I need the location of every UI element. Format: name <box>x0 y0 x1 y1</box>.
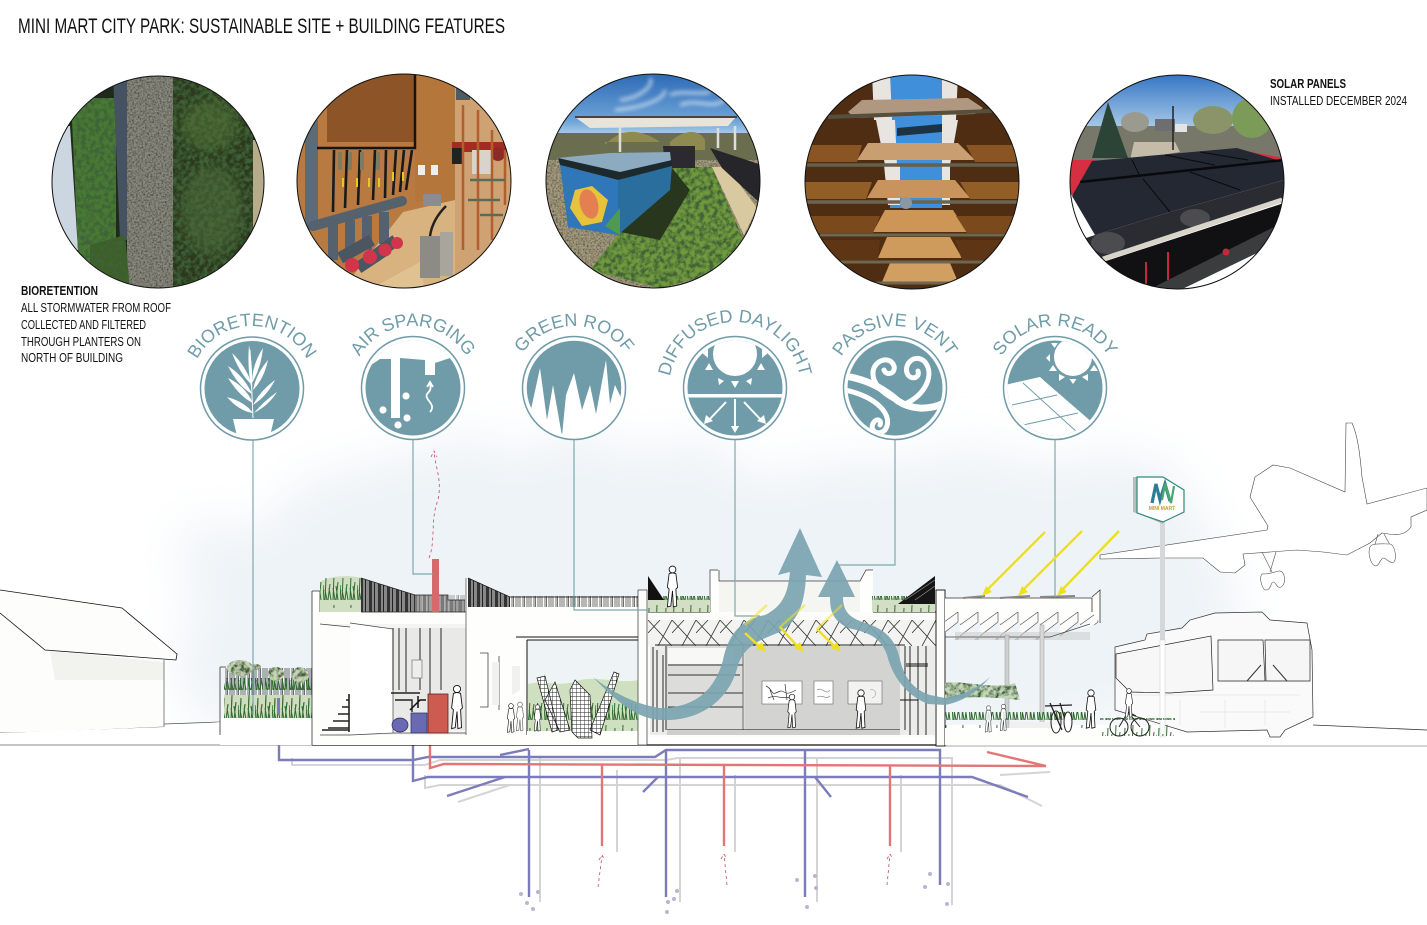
boiler red tank <box>428 694 448 733</box>
underground pipes: gray shadows <box>292 757 1050 905</box>
wall east of gallery <box>936 590 945 746</box>
curved labels <box>187 310 1118 375</box>
gallery section <box>638 566 945 746</box>
gallery interior <box>665 645 905 730</box>
curved labels: BIORETENTION <box>187 313 317 358</box>
photo outline 1 <box>52 76 264 288</box>
curved labels: GREEN ROOF <box>516 314 635 350</box>
neighboring house <box>0 590 220 733</box>
photo: bioretention planter from above <box>50 74 266 290</box>
west mid wall and window <box>465 578 467 735</box>
air sparging stack <box>432 559 439 612</box>
sculpture letters <box>537 672 619 738</box>
group of people in breezeway <box>507 704 515 732</box>
breezeway opening <box>527 640 638 735</box>
sun rays: skylight <box>745 605 842 652</box>
solar canopy <box>945 590 1115 745</box>
ground <box>0 722 1427 925</box>
title: MINI MART CITY PARK: SUSTAINABLE SITE + BUILDING FEATURES <box>18 15 505 38</box>
photo outline 5 <box>1070 75 1284 289</box>
west stair <box>322 694 349 732</box>
feature leader lines <box>253 440 1055 715</box>
sign pole <box>1160 521 1165 737</box>
airplane silhouette <box>1100 423 1427 590</box>
dashed air arrows <box>429 451 893 887</box>
wind arrow: air flow east swoosh <box>818 560 990 705</box>
mini mart sign: MINI MART <box>1149 506 1175 512</box>
caption: bioretention: ALL STORMWATER FROM ROOF <box>21 300 171 315</box>
roof planter east <box>872 598 935 612</box>
caption: bioretention: THROUGH PLANTERS ON <box>21 334 141 349</box>
photo: diffused daylight skylight <box>803 73 1023 293</box>
artwork <box>762 681 802 704</box>
wind arrow: air flow west swoosh <box>593 528 822 720</box>
roof truss <box>648 620 936 646</box>
photo: solar panels <box>1068 73 1288 295</box>
slanted roof fence <box>468 578 510 607</box>
roof planter west <box>648 598 710 612</box>
ground line <box>0 745 1427 746</box>
photo outline 3 <box>546 74 760 288</box>
photo: green roof <box>544 72 764 290</box>
icon: solar ready <box>1000 336 1106 445</box>
underground pipes: blue <box>279 745 1028 897</box>
caption: bioretention: NORTH OF BUILDING <box>21 350 123 365</box>
watercolor sky wash <box>190 445 1270 730</box>
blue tank <box>411 713 427 733</box>
icon: diffused daylight <box>683 332 787 440</box>
curved labels: AIR SPARGING <box>352 314 474 356</box>
wall west of gallery <box>638 590 647 745</box>
sun rays: solar canopy <box>982 531 1119 596</box>
curved labels: SOLAR READY <box>994 314 1118 354</box>
icon: bioretention plant <box>200 337 304 440</box>
underground pipes: red <box>430 745 1046 846</box>
bioretention planter section <box>220 660 312 745</box>
person by boiler <box>452 685 462 729</box>
curved labels: DIFFUSED DAYLIGHT <box>658 310 812 375</box>
mechanical pipes <box>393 628 441 695</box>
curved labels: PASSIVE VENT <box>832 313 958 356</box>
people and bikes east <box>985 689 1175 736</box>
icon: passive vent <box>844 336 946 440</box>
mini mart sign <box>1133 477 1184 524</box>
photo: air sparging manifold room <box>295 72 515 292</box>
west building section <box>312 559 638 745</box>
icon: green roof <box>520 335 630 440</box>
ground contour east <box>1313 725 1427 730</box>
caption: bioretention: BIORETENTION <box>21 283 98 298</box>
injection points <box>519 872 950 914</box>
photo outline 4 <box>805 75 1019 289</box>
west roof parapet <box>361 578 465 612</box>
gallery visitors <box>788 694 796 728</box>
caption: bioretention <box>21 283 171 365</box>
caption: solar panels <box>1270 76 1407 108</box>
icon: air sparging <box>360 335 470 440</box>
photo outline 2 <box>297 74 511 288</box>
bus <box>1115 612 1313 737</box>
caption: bioretention: COLLECTED AND FILTERED <box>21 317 146 332</box>
caption: solar panels: SOLAR PANELS <box>1270 76 1346 91</box>
